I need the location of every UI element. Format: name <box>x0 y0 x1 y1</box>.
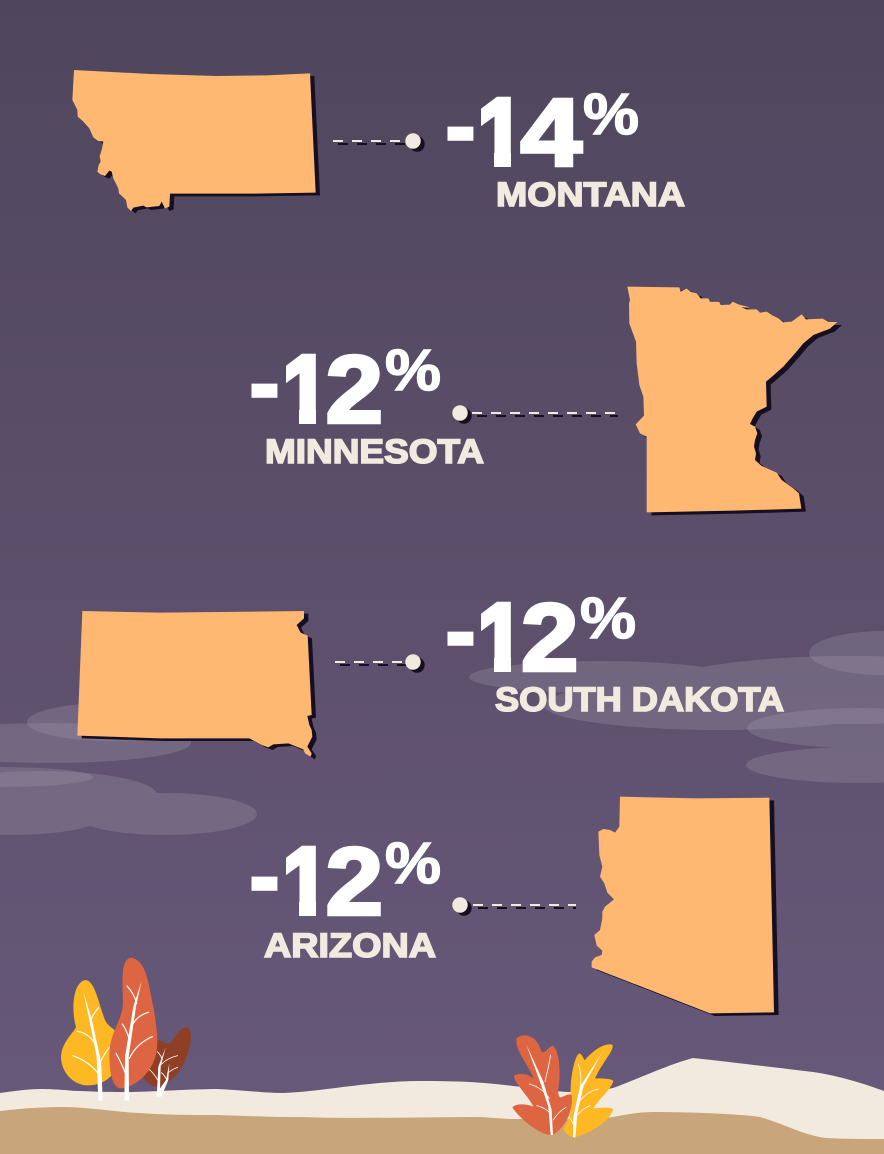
leaves <box>512 1035 613 1137</box>
map: Minnesota <box>627 287 842 515</box>
value: Montana: 4 <box>520 80 582 186</box>
map: Montana <box>72 70 320 214</box>
value: South Dakota: 2 <box>521 584 578 692</box>
panel: Montana <box>72 70 685 214</box>
clouds: right <box>469 631 884 783</box>
connector: Minnesota <box>452 405 618 424</box>
value: Arizona: 1 <box>283 828 328 936</box>
label: Minnesota: MINNESOTA <box>265 433 484 471</box>
ground: cream hills <box>0 1058 884 1154</box>
label: South Dakota: SOUTH DAKOTA <box>495 681 784 719</box>
value: Minnesota: % <box>385 338 441 403</box>
clouds: left <box>0 703 257 835</box>
connector: Montana <box>333 133 425 152</box>
panel: South Dakota <box>77 596 784 760</box>
leaf: yellow <box>563 1044 613 1137</box>
value: South Dakota <box>448 596 636 672</box>
value: Minnesota: - <box>249 327 280 437</box>
connector: South Dakota <box>335 654 425 673</box>
tree: yellow <box>61 980 115 1101</box>
map: Arizona <box>592 797 779 1016</box>
value: Minnesota: 2 <box>326 336 383 444</box>
panel: Arizona <box>249 797 779 1016</box>
map: South Dakota <box>77 611 317 759</box>
tree: dark brown <box>143 1027 191 1097</box>
panel: Minnesota <box>249 287 842 515</box>
value: Montana: - <box>445 70 476 180</box>
label: Montana: MONTANA <box>496 176 685 214</box>
label: Arizona: ARIZONA <box>264 927 436 965</box>
value: Montana <box>448 92 638 168</box>
value: Arizona: - <box>249 820 280 930</box>
leaf: orange <box>512 1035 572 1135</box>
connector: Arizona <box>452 897 576 916</box>
value: Montana: % <box>583 82 639 147</box>
value: South Dakota: - <box>445 575 476 685</box>
value: Arizona <box>252 842 440 916</box>
value: South Dakota: % <box>580 586 636 651</box>
value: Montana: 1 <box>478 80 523 186</box>
value: Arizona: % <box>385 831 441 896</box>
trees <box>61 958 191 1101</box>
value: Minnesota <box>252 348 440 424</box>
value: Arizona: 2 <box>326 828 383 936</box>
ground: brown foreground <box>0 1107 884 1154</box>
tree: orange <box>109 958 157 1101</box>
value: South Dakota: 1 <box>478 584 523 692</box>
value: Minnesota: 1 <box>283 336 328 444</box>
